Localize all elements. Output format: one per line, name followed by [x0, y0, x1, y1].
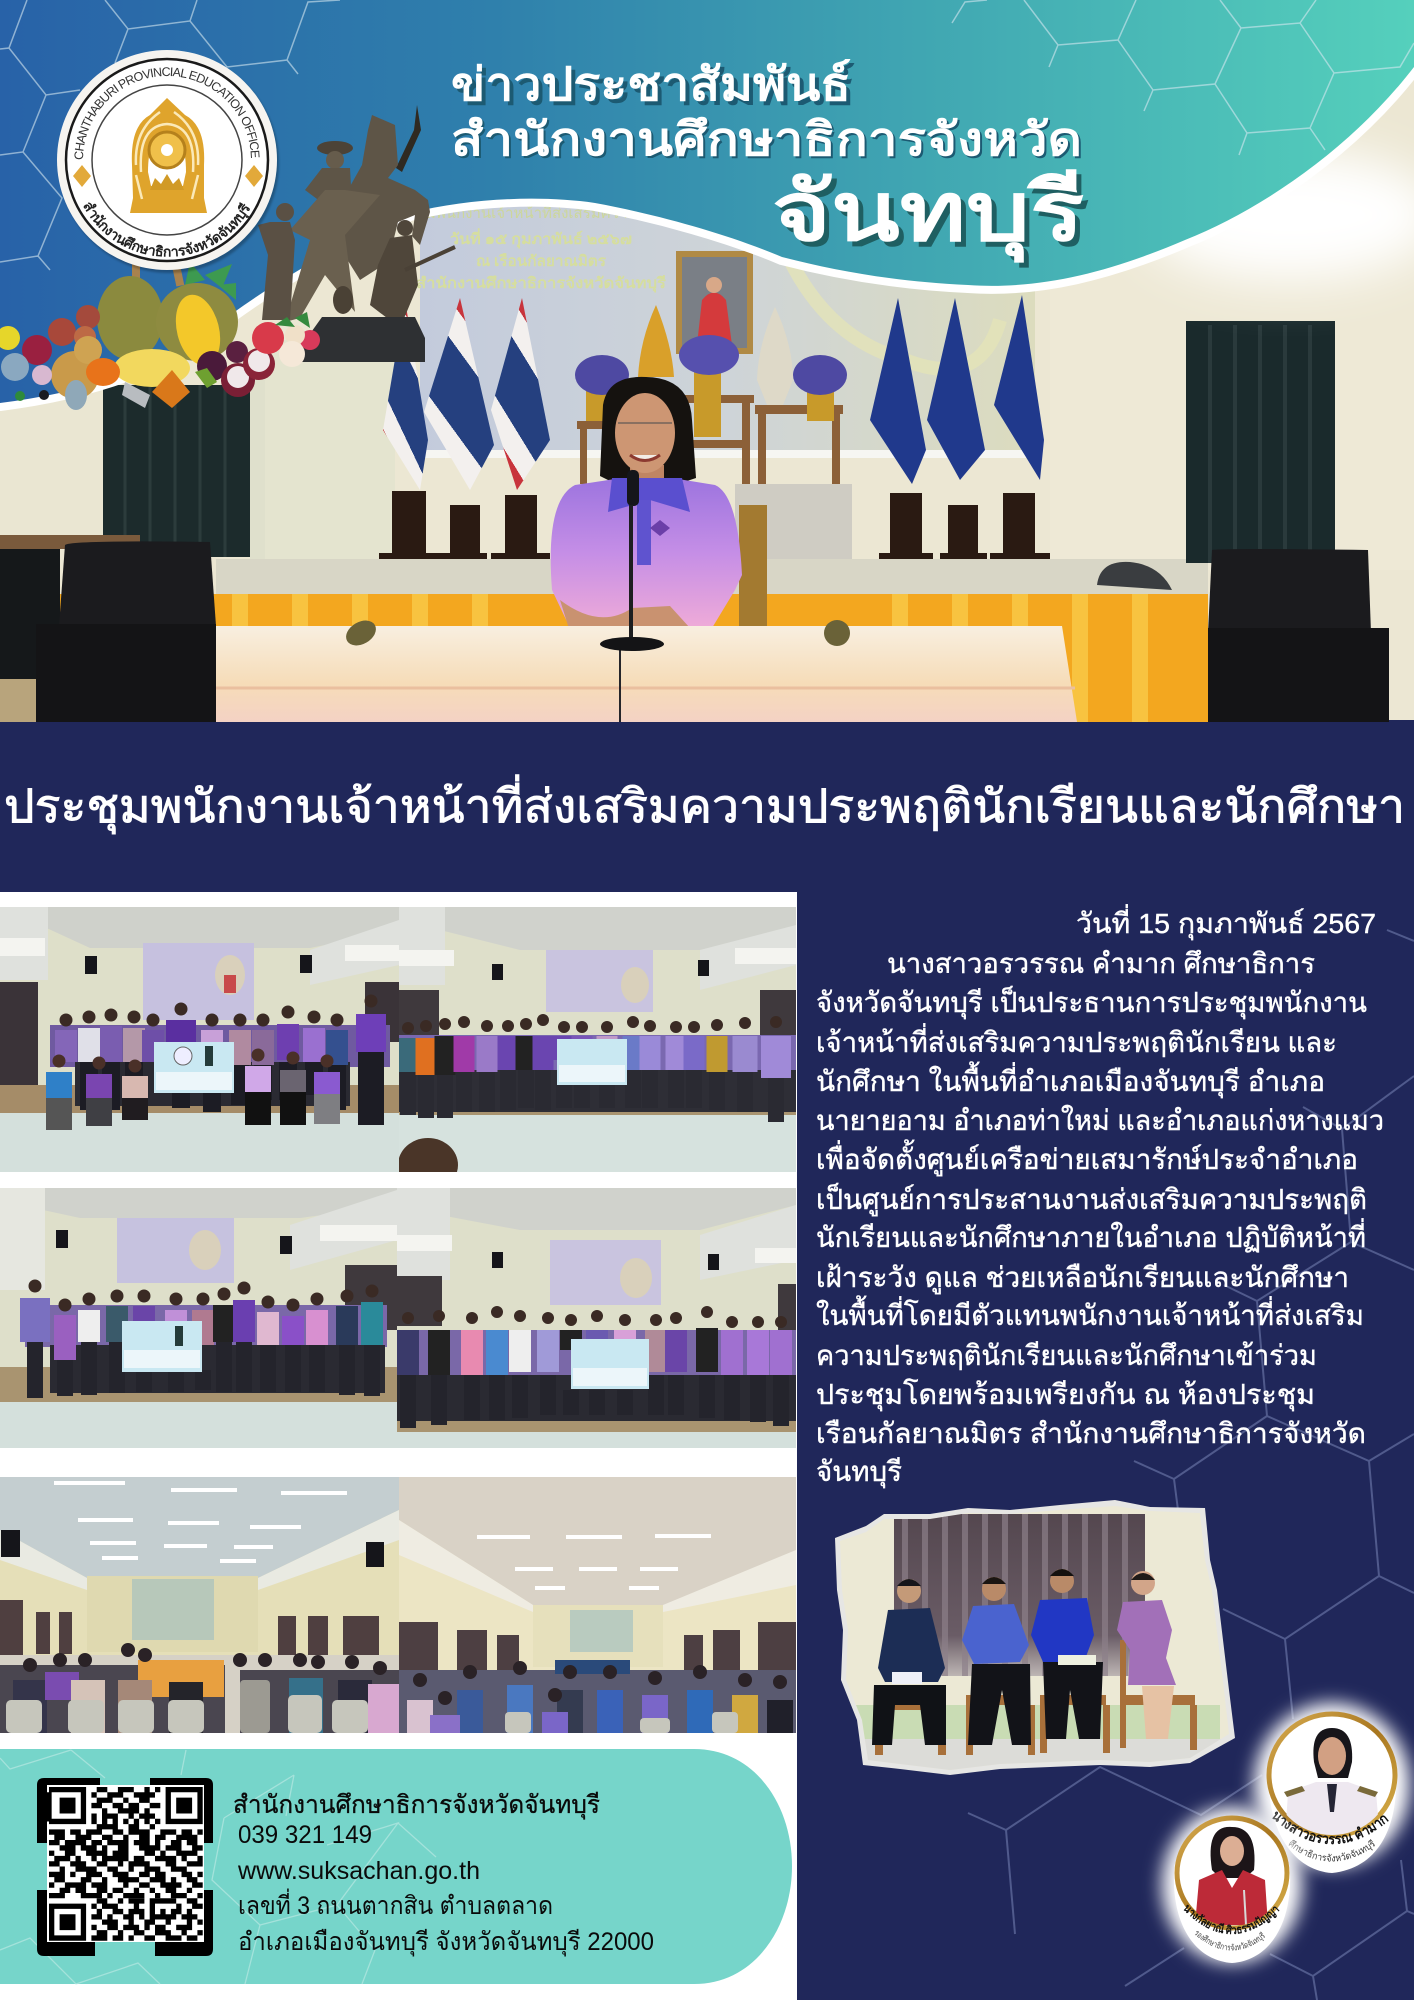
article body: นางสาวอรวรรณ คำมาก ศึกษาธิการ: [887, 948, 1315, 979]
projector screen with slide text: ประชุมพนักงานเจ้าหน้าที่ส่งเสริมความประพฤติ: [390, 202, 692, 223]
portrait: provincial education officer: [1239, 1688, 1414, 1882]
bag on stage: [1097, 562, 1172, 590]
fruits and gems cluster: [0, 255, 320, 410]
article body: เป็นศูนย์การประสานงานส่งเสริมความประพฤติ: [816, 1182, 1367, 1217]
projector screen with slide text: [390, 190, 1035, 458]
article body: ประชุมโดยพร้อมเพรียงกัน ณ ห้องประชุม: [816, 1378, 1315, 1412]
article body: [816, 948, 1384, 1489]
person 4: [1117, 1571, 1176, 1739]
article body: นักศึกษา ในพื้นที่อำเภอเมืองจันทบุรี อำเภอ: [816, 1061, 1325, 1099]
right door: [1186, 321, 1335, 563]
flag stands: [379, 491, 1050, 562]
article body: จันทบุรี: [816, 1456, 902, 1489]
photo: group 4: [397, 1188, 796, 1448]
article body: นักเรียนและนักศึกษาภายในอำเภอ ปฏิบัติหน้าที่: [816, 1218, 1366, 1253]
speaker woman: [551, 377, 767, 632]
left speakers: [36, 541, 216, 722]
contact panel hexagon lines: [0, 1750, 436, 1984]
portrait: provincial education officer: นางสาวอรวรรณ คำมาก: [1272, 1812, 1389, 1844]
article body: ความประพฤตินักเรียนและนักศึกษาเข้าร่วม: [816, 1340, 1317, 1371]
blue flags: [870, 295, 1044, 484]
royal portrait: [676, 251, 753, 354]
microphone on stand: [600, 470, 664, 651]
table microphones: [342, 615, 850, 651]
heading: จันทบุรี: จันทบุรี: [777, 172, 1089, 268]
logo seal: สำนักงานศึกษาธิการจังหวัดจันทบุรี: [84, 202, 250, 257]
main hero photo: speaker on stage: [0, 0, 1414, 722]
banner hexagon lines: [0, 0, 1414, 270]
torn-edge photo of four seated officials: [830, 1500, 1240, 1780]
logo seal: CHANTHABURI PROVINCIAL EDUCATION OFFICE: [74, 67, 260, 160]
heading: ข่าวประชาสัมพันธ์: ข่าวประชาสัมพันธ์: [455, 62, 855, 114]
statue of King Taksin: [258, 105, 455, 328]
right speakers: [1208, 549, 1389, 722]
article body: เฝ้าระวัง ดูแล ช่วยเหลือนักเรียนและนักศึกษา: [816, 1262, 1349, 1295]
navy panel hexagon lines: [968, 930, 1414, 2000]
page navy background: [0, 720, 1414, 2000]
stage floor: [216, 559, 1208, 595]
projector screen with slide text: วันที่ ๑๕ กุมภาพันธ์ ๒๕๖๗: [450, 228, 632, 249]
photo: group 2: [398, 907, 796, 1192]
contact: website: www.suksachan.go.th: [237, 1857, 480, 1885]
person 2: [962, 1577, 1031, 1745]
portrait: provincial education officer: ศึกษาธิการจังหวัดจันทบุรี: [1288, 1839, 1375, 1862]
article body: เรือนกัลยาณมิตร สำนักงานศึกษาธิการจังหวัด: [816, 1418, 1366, 1449]
altar tables: [577, 395, 843, 486]
photo: meeting hall left: [0, 1477, 399, 1733]
statue pedestal: [302, 317, 425, 362]
person 3: [1031, 1569, 1103, 1739]
article body: ในพื้นที่โดยมีตัวแทนพนักงานเจ้าหน้าที่ส่งเสริม: [816, 1295, 1364, 1331]
photo: group 1: [0, 907, 399, 1172]
top banner with wave: [0, 0, 1414, 403]
contact: address line 1: เลขที่ 3 ถนนตากสิน ตำบลตลาด: [238, 1888, 553, 1920]
person 1: [872, 1579, 946, 1745]
offering ornaments and flower vases: [575, 305, 847, 437]
article body: เจ้าหน้าที่ส่งเสริมความประพฤตินักเรียน และ: [816, 1023, 1337, 1058]
thai flags: [383, 298, 550, 490]
left door: [103, 370, 265, 560]
portrait: deputy education officer: นางกัลยาณี ศิวธรรมปัญญา: [1184, 1904, 1280, 1934]
qr code: [37, 1778, 213, 1956]
orange stage skirt: [54, 594, 1208, 722]
portrait: deputy education officer: [1147, 1792, 1317, 1978]
logo seal: [57, 50, 280, 274]
heading: สำนักงานศึกษาธิการจังหวัด: สำนักงานศึกษาธิการจังหวัด: [451, 114, 1082, 165]
title: ประชุมพนักงานเจ้าหน้าที่ส่งเสริมความประพฤตินักเรียนและนักศึกษา: [4, 774, 1405, 835]
left counter: [0, 535, 140, 722]
article body: นายายอาม อำเภอท่าใหม่ และอำเภอแก่งหางแมว: [816, 1104, 1384, 1136]
contact panel: [0, 1749, 792, 1984]
projector screen with slide text: สำนักงานศึกษาธิการจังหวัดจันทบุรี: [416, 274, 667, 293]
lace cloth: [735, 484, 852, 570]
article body: จังหวัดจันทบุรี เป็นประธานการประชุมพนักงาน: [816, 985, 1367, 1020]
article date: วันที่ 15 กุมภาพันธ์ 2567: [1076, 904, 1376, 941]
contact: address line 2: อำเภอเมืองจันทบุรี จังหวัดจันทบุรี 22000: [238, 1928, 654, 1957]
heading: จันทบุรี: จันทบุรี: [772, 167, 1084, 263]
article body: เพื่อจัดตั้งศูนย์เครือข่ายเสมารักษ์ประจำอำเภอ: [816, 1139, 1358, 1177]
photo: meeting hall right: [399, 1477, 796, 1733]
table with lace cloth: [198, 626, 1077, 722]
contact: office name: สำนักงานศึกษาธิการจังหวัดจันทบุรี: [233, 1791, 600, 1820]
portrait: deputy education officer: รองศึกษาธิการจังหวัดจันทบุรี: [1195, 1931, 1265, 1950]
heading: สำนักงานศึกษาธิการจังหวัด: สำนักงานศึกษาธิการจังหวัด: [453, 116, 1084, 167]
chairs: [875, 1640, 1197, 1755]
right wall highlight: [1140, 150, 1414, 280]
projector screen with slide text: ณ เรือนกัลยาณมิตร: [476, 252, 607, 270]
gold emblem: [130, 98, 207, 213]
contact: phone: 039 321 149: [238, 1821, 372, 1849]
heading: ข่าวประชาสัมพันธ์: ข่าวประชาสัมพันธ์: [451, 58, 851, 110]
photo: group 3: [0, 1188, 397, 1448]
